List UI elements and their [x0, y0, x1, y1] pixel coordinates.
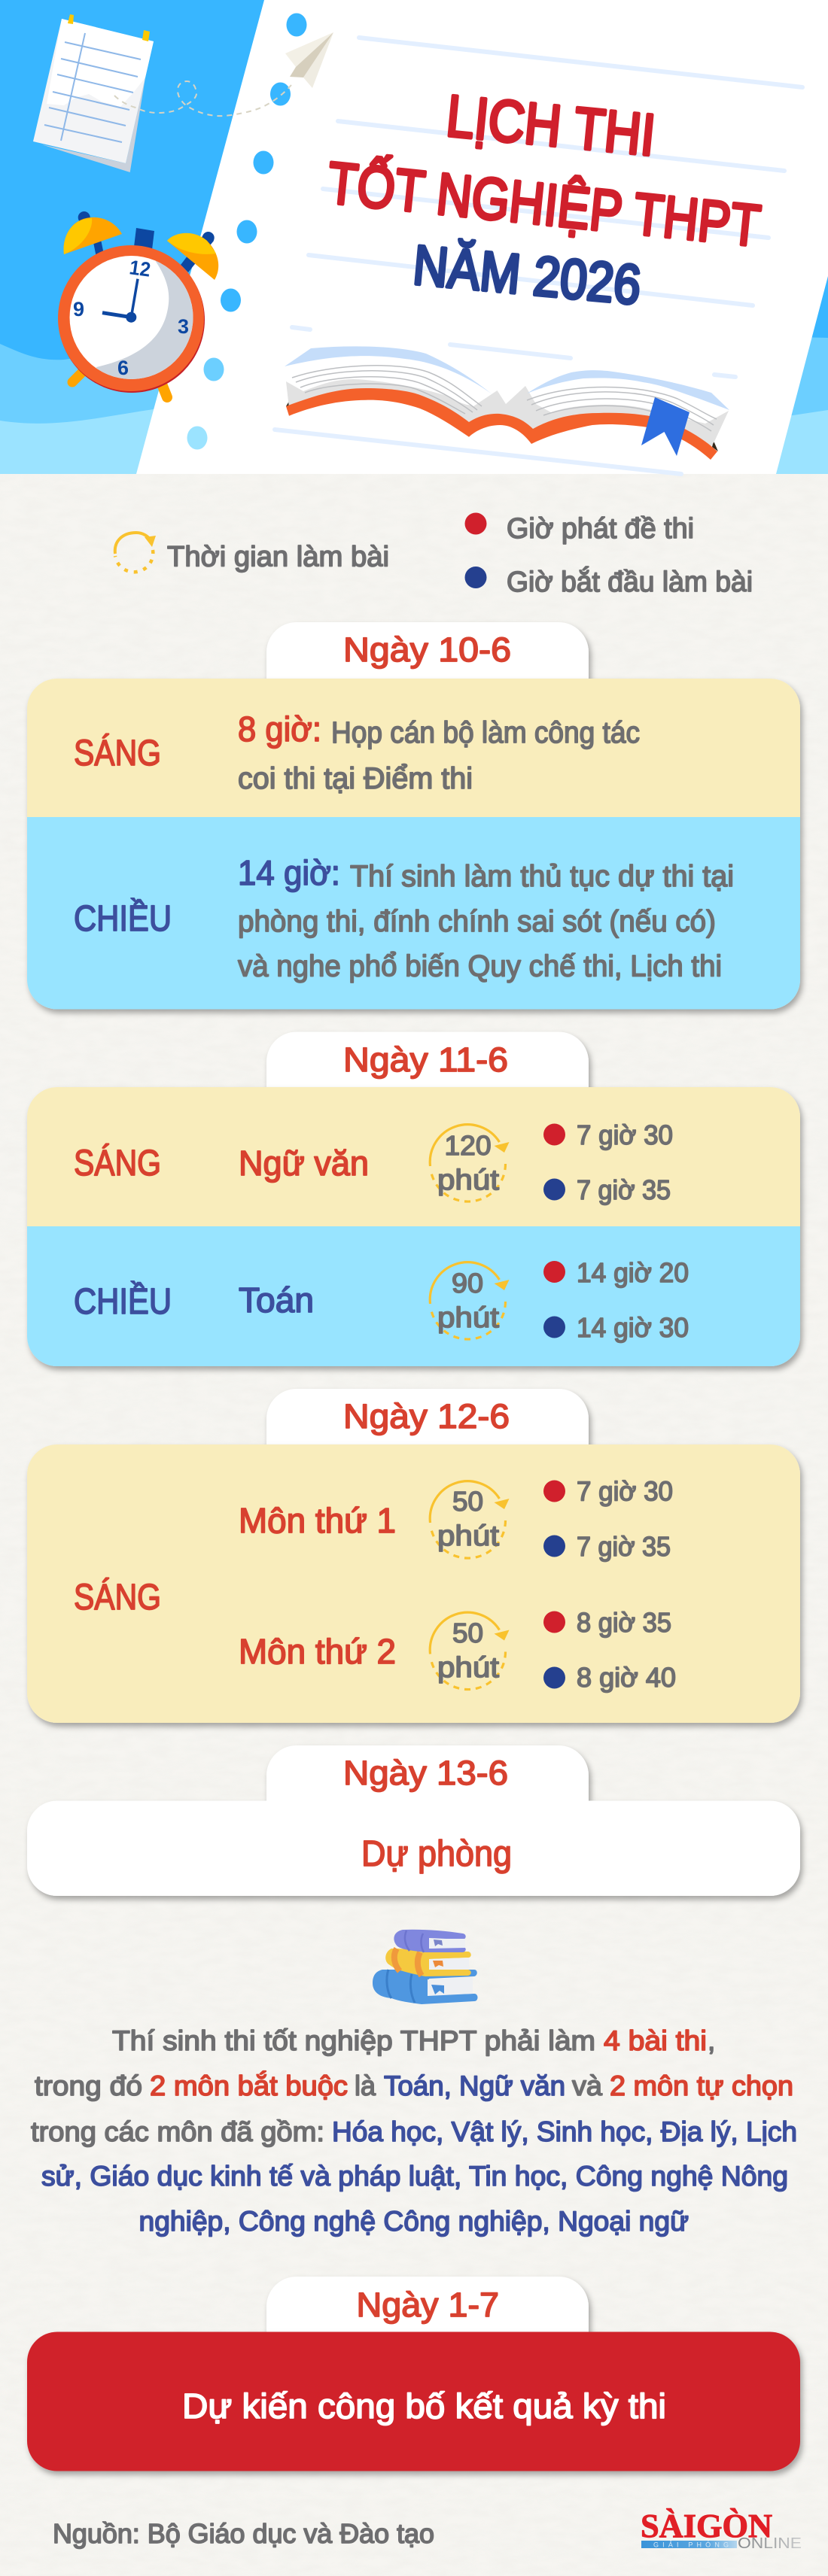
source: Nguồn: Bộ Giáo dục và Đào tạo — [53, 2518, 434, 2549]
tab: Ngày 12-6 — [266, 1389, 589, 1447]
timer: 50 minutes: phút — [437, 1652, 499, 1684]
icon: alarm clock: 12 — [128, 256, 152, 281]
morning row: 7 giờ 35 — [577, 1174, 671, 1205]
afternoon row: phòng thi, đính chính sai sót (nếu có) — [238, 905, 716, 938]
afternoon row: và nghe phổ biến Quy chế thi, Lịch thi — [238, 949, 722, 983]
text block: exam rules: 4 bài thi — [604, 2025, 707, 2056]
tab: Ngày 1-7: Ngày 1-7 — [357, 2286, 499, 2324]
logo: Sài Gòn Online: GIẢI PHÓNG — [653, 2540, 729, 2549]
text block: exam rules: , — [708, 2025, 715, 2056]
text block: exam rules: Hóa học, Vật lý, Sinh học, Địa lý, Lịch — [332, 2116, 797, 2147]
afternoon row: 14 giờ 20 — [577, 1257, 689, 1288]
panel: day 12-6 — [27, 1389, 800, 1723]
panel: day 10-6 — [27, 622, 800, 1010]
tab: Ngày 12-6: Ngày 12-6 — [343, 1397, 510, 1435]
icon: alarm clock: 3 — [178, 315, 189, 338]
card background — [27, 1087, 800, 1366]
morning row: 8 giờ: — [238, 709, 321, 749]
tab: Ngày 11-6: Ngày 11-6 — [343, 1040, 508, 1079]
legend dot: start time — [465, 567, 486, 588]
panel: notebook paper — [136, 0, 828, 474]
morning row — [74, 1119, 673, 1205]
afternoon row: 14 giờ 30 — [577, 1312, 689, 1343]
legend — [115, 513, 753, 598]
morning row: SÁNG — [74, 734, 161, 773]
subject 2 row: Môn thứ 2 — [239, 1632, 396, 1671]
text block: exam rules: 2 môn tự chọn — [610, 2070, 793, 2101]
timer: 120 minutes: phút — [437, 1165, 499, 1196]
book cover — [286, 388, 717, 460]
subject 1 row: 7 giờ 30 — [577, 1476, 673, 1506]
title: LỊCH THI — [443, 82, 659, 169]
text block: exam rules: Thí sinh thi tốt nghiệp THPT phải làm — [112, 2025, 595, 2056]
tab: Ngày 1-7 — [266, 2277, 589, 2334]
bookmark — [641, 397, 689, 456]
timer: 50 minutes — [430, 1612, 509, 1690]
timer: 120 minutes: 120 — [444, 1130, 491, 1161]
card background — [27, 1444, 800, 1723]
legend dot: distribution time — [465, 513, 486, 534]
icon: open book — [285, 346, 729, 460]
timer: 90 minutes — [430, 1262, 509, 1339]
panel: day 13-6 — [27, 1745, 800, 1896]
timer: 120 minutes — [430, 1125, 509, 1201]
icon: duration ring — [115, 533, 156, 572]
panel: day 11-6 — [27, 1032, 800, 1366]
icon: alarm clock: 9 — [73, 298, 84, 320]
card: reserve day: Dự phòng — [361, 1834, 512, 1874]
icon: note sheet — [33, 14, 154, 172]
book: blue — [373, 1970, 477, 2004]
morning row — [74, 709, 640, 795]
morning row: coi thi tại Điểm thi — [238, 762, 473, 795]
afternoon row: Thí sinh làm thủ tục dự thi tại — [350, 860, 734, 893]
text block: exam rules: trong đó — [35, 2070, 142, 2101]
logo: Sài Gòn Online — [641, 2508, 802, 2552]
morning row: SÁNG — [74, 1144, 161, 1183]
book pages — [286, 379, 729, 451]
subject 2 row: 8 giờ 35 — [577, 1607, 671, 1638]
logo: Sài Gòn Online: SÀIGÒN — [641, 2508, 772, 2544]
timer: 50 minutes: 50 — [452, 1486, 483, 1517]
timer: 50 minutes — [430, 1481, 509, 1558]
text block: exam rules: là — [355, 2070, 376, 2101]
afternoon row: 14 giờ: — [238, 853, 340, 892]
text block: exam rules: sử, Giáo dục kinh tế và pháp luật, Tin học, Công nghệ Nông — [41, 2161, 788, 2192]
timer: 90 minutes: 90 — [452, 1268, 483, 1299]
timer: 50 minutes: 50 — [452, 1618, 483, 1648]
text block: exam rules: trong các môn đã gồm: — [31, 2116, 324, 2147]
legend label: distribution time: Giờ phát đề thi — [507, 513, 694, 545]
subject 1 row — [239, 1476, 673, 1562]
timer: 50 minutes: phút — [437, 1520, 499, 1552]
afternoon row: Toán — [239, 1280, 314, 1320]
subject 2 row: 8 giờ 40 — [577, 1662, 676, 1693]
subject 1 row: 7 giờ 35 — [577, 1531, 671, 1562]
text block: exam rules: 2 môn bắt buộc — [150, 2070, 348, 2101]
title — [324, 82, 763, 316]
icon: alarm clock — [58, 211, 218, 397]
book: yellow — [385, 1949, 471, 1976]
icon: alarm clock: 6 — [117, 357, 129, 379]
icon: paper plane with dashed trail — [114, 32, 333, 116]
title: NĂM 2026 — [411, 233, 644, 316]
header illustration — [0, 0, 828, 474]
subject 2 row — [239, 1607, 676, 1693]
morning row: Họp cán bộ làm công tác — [331, 716, 640, 749]
text block: exam rules: nghiệp, Công nghệ Công nghiệp, Ngoại ngữ — [139, 2206, 689, 2237]
legend label: duration: Thời gian làm bài — [167, 542, 389, 573]
afternoon row — [74, 853, 734, 983]
card: results announcement — [27, 2332, 800, 2471]
afternoon row — [74, 1257, 689, 1343]
text block: exam rules: Toán, Ngữ văn — [384, 2070, 565, 2101]
afternoon row: CHIỀU — [74, 1281, 172, 1322]
panel: day 1-7 — [27, 2277, 800, 2471]
afternoon row: CHIỀU — [74, 898, 172, 939]
icon: stack of books — [373, 1930, 477, 2004]
session label: SÁNG — [74, 1578, 161, 1618]
card: results announcement: Dự kiến công bố kết quả kỳ thi — [182, 2386, 666, 2426]
card background — [27, 679, 800, 1010]
morning row: Ngữ văn — [239, 1144, 369, 1183]
logo: Sài Gòn Online: ONLINE — [738, 2535, 802, 2552]
text block: exam rules — [31, 2025, 797, 2237]
subject 1 row: Môn thứ 1 — [239, 1501, 396, 1540]
tab: Ngày 10-6 — [266, 622, 589, 681]
tab: Ngày 13-6 — [266, 1745, 589, 1803]
tab: Ngày 13-6: Ngày 13-6 — [343, 1754, 508, 1792]
tab: Ngày 11-6 — [266, 1032, 589, 1089]
morning row: 7 giờ 30 — [577, 1119, 673, 1150]
card: reserve day — [27, 1794, 800, 1896]
text block: exam rules: và — [572, 2070, 602, 2101]
tab: Ngày 10-6: Ngày 10-6 — [343, 630, 511, 669]
legend label: start time: Giờ bắt đầu làm bài — [507, 566, 753, 598]
timer: 90 minutes: phút — [437, 1302, 499, 1334]
book: purple — [394, 1930, 466, 1952]
